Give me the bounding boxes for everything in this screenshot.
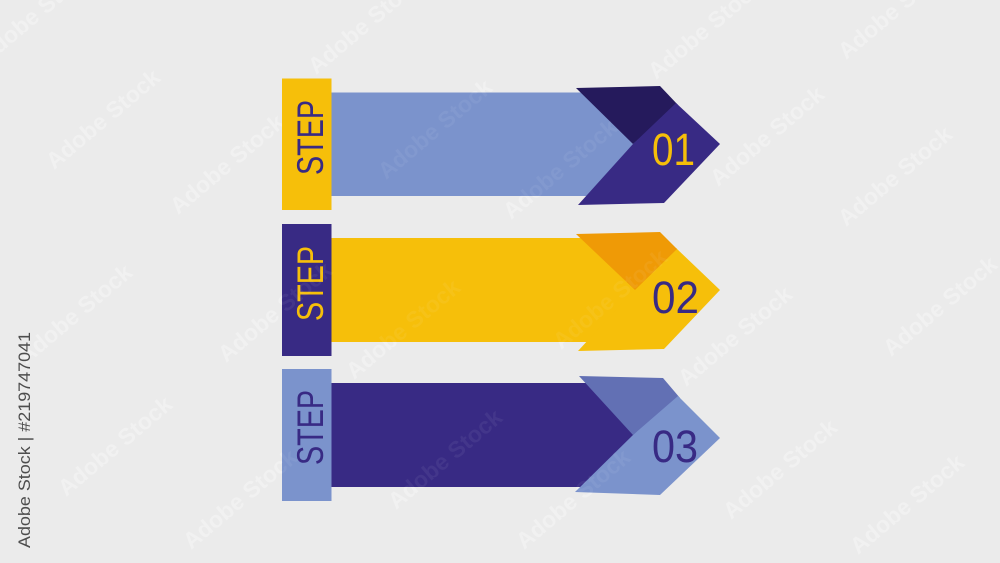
- step 2 arrow head: [578, 248, 720, 351]
- background watermarks: Adobe Stock: [718, 414, 842, 524]
- step 3 arrow head: [575, 396, 720, 495]
- background watermarks: Adobe Stock: [498, 114, 622, 224]
- faint watermarks over shapes: Adobe Stock: [213, 257, 337, 367]
- faint watermarks over shapes: Adobe Stock: [178, 444, 302, 554]
- background watermarks: Adobe Stock: [341, 274, 465, 384]
- faint watermarks over shapes: [178, 74, 672, 554]
- background watermarks: Adobe Stock: [673, 281, 797, 391]
- faint watermarks over shapes: Adobe Stock: [341, 274, 465, 384]
- background watermarks: Adobe Stock: [548, 244, 672, 354]
- background watermarks: Adobe Stock: [705, 81, 829, 191]
- step 1 arrow fold: [576, 86, 678, 144]
- step 3 tab label: STEP: [290, 390, 331, 465]
- step 1 bar: [331, 92, 640, 196]
- background watermarks: Adobe Stock: [373, 74, 497, 184]
- background watermarks: Adobe Stock: [511, 444, 635, 554]
- step 2 tab: [282, 224, 332, 356]
- background watermarks: Adobe Stock: [41, 64, 165, 174]
- step 1 arrow head: [578, 103, 720, 205]
- background watermarks: Adobe Stock: [845, 449, 969, 559]
- step 3 arrow fold: [579, 376, 680, 435]
- background watermarks: Adobe Stock: [213, 257, 337, 367]
- background watermarks: Adobe Stock: [833, 121, 957, 231]
- background watermarks: Adobe Stock: [53, 391, 177, 501]
- background watermarks: Adobe Stock: [13, 259, 137, 369]
- background watermarks: Adobe Stock: [178, 444, 302, 554]
- background watermarks: Adobe Stock: [878, 251, 1000, 361]
- step 2: [282, 224, 720, 356]
- step 2 number: 02: [652, 272, 699, 323]
- faint watermarks over shapes: Adobe Stock: [498, 114, 622, 224]
- step 3 number: 03: [652, 421, 698, 472]
- step 2 arrow fold: [576, 232, 677, 290]
- step 3: [282, 369, 720, 501]
- step 1 tab: [282, 78, 332, 210]
- stock id caption: Adobe Stock | #219747041: [15, 332, 34, 548]
- step 1 tab label: STEP: [290, 100, 331, 175]
- step 2 bar: [331, 238, 640, 342]
- step 1: [282, 78, 720, 210]
- step 2 tab label: STEP: [290, 246, 331, 321]
- step 3 bar: [331, 383, 640, 487]
- faint watermarks over shapes: Adobe Stock: [548, 244, 672, 354]
- step 3 tab: [282, 369, 332, 501]
- faint watermarks over shapes: Adobe Stock: [373, 74, 497, 184]
- background watermarks: Adobe Stock: [165, 109, 289, 219]
- faint watermarks over shapes: Adobe Stock: [383, 404, 507, 514]
- step 1 number: 01: [652, 124, 695, 175]
- background watermarks: Adobe Stock: [383, 404, 507, 514]
- faint watermarks over shapes: Adobe Stock: [511, 444, 635, 554]
